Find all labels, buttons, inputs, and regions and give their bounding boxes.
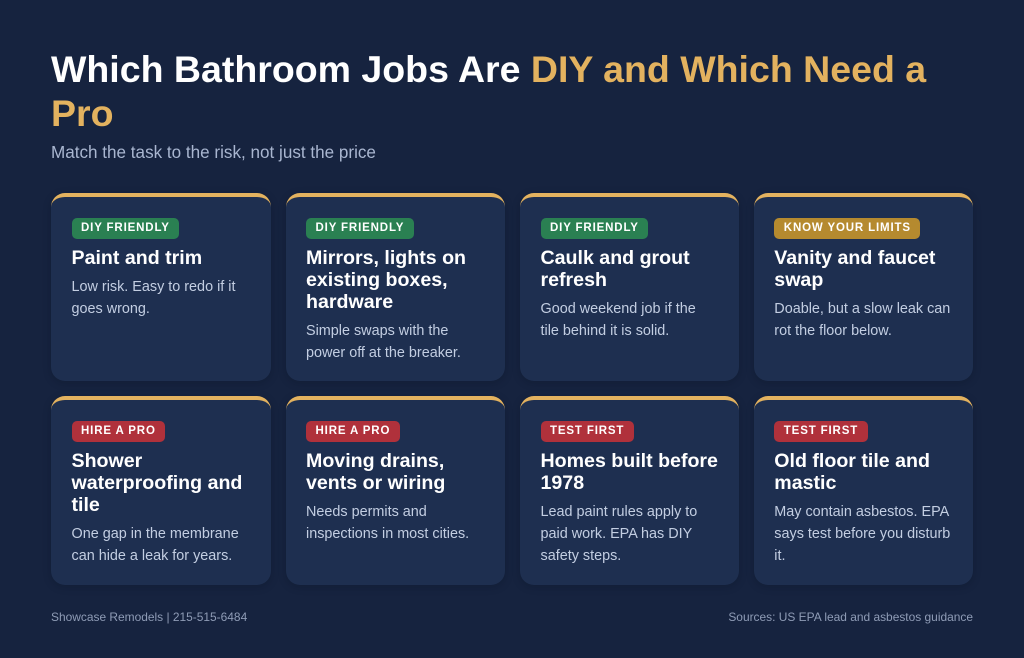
badge: test first: TEST FIRST [784,425,858,437]
heading: shower waterproofing: tile [72,494,100,516]
text: shower description: can hide a leak for years. [72,548,232,564]
badge: DIY friendly: DIY FRIENDLY [316,222,404,234]
heading: old floor tile: Old floor tile and [774,450,930,472]
panel: homes before 1978 [520,396,739,585]
text: drains description [306,504,469,542]
text: paint and trim description: Low risk. Easy to redo if it [72,279,235,295]
heading: mirrors, lights, hardware: hardware [306,291,393,313]
heading: moving drains: vents or wiring [306,472,445,494]
badge: DIY friendly [540,218,648,238]
text: asbestos description: May contain asbestos. EPA [774,504,949,520]
badge: know your limits [774,218,920,238]
heading: paint and trim: Paint and trim [72,247,202,269]
title [51,48,926,134]
badge: DIY friendly: DIY FRIENDLY [550,222,639,234]
text: caulk description [540,301,696,339]
badge: hire a pro [306,421,400,442]
heading: old floor tile [774,450,930,494]
heading: old floor tile: mastic [774,472,836,494]
heading: mirrors, lights, hardware: existing boxes, [306,269,448,291]
heading: shower waterproofing: waterproofing and [72,472,242,494]
text: shower description [72,526,239,564]
text: mirrors description [306,323,461,361]
text: lead paint description: safety steps. [540,548,621,564]
heading: caulk and grout: refresh [540,269,607,291]
footer: company contact: Showcase Remodels | 215-515-6484 [51,610,247,624]
heading: caulk and grout [540,247,690,291]
text: asbestos description: it. [774,548,786,564]
badge: hire a pro: HIRE A PRO [81,425,156,437]
panel: vanity and faucet [754,193,973,381]
text: paint and trim description: goes wrong. [72,301,150,317]
panel: shower waterproofing [51,396,271,585]
heading: homes before 1978: Homes built before [540,450,718,472]
badge: test first [774,421,868,442]
heading: vanity and faucet: Vanity and faucet [774,247,935,269]
text: lead paint description: Lead paint rules apply to [540,504,697,520]
text: lead paint description [540,504,697,564]
heading: shower waterproofing [72,450,242,516]
text: asbestos description [774,504,950,564]
heading: vanity and faucet: swap [774,269,823,291]
badge: DIY friendly [306,218,414,238]
text: vanity description [774,301,950,339]
title: Which Bathroom Jobs Are DIY and Which Need a [51,48,926,90]
heading: homes before 1978 [540,450,718,494]
text: drains description: Needs permits and [306,504,427,520]
text: lead paint description: paid work. EPA has DIY [540,526,692,542]
heading: mirrors, lights, hardware [306,247,466,313]
title: Pro [51,92,114,134]
badge: hire a pro [72,421,165,442]
text: caulk description: Good weekend job if the [540,301,696,317]
text: mirrors description: Simple swaps with the [306,323,448,339]
panel: moving drains [286,396,505,585]
text: vanity description: rot the floor below. [774,323,892,339]
heading: vanity and faucet [774,247,936,291]
badge: DIY friendly [72,218,179,238]
text: paint and trim description [72,279,236,317]
subtitle: Match the task to the risk, not just the price [51,143,376,162]
panel: old floor tile [754,396,973,585]
badge: DIY friendly: DIY FRIENDLY [81,222,170,234]
footer: sources: Sources: US EPA lead and asbestos guidance [728,610,973,624]
text: mirrors description: power off at the breaker. [306,345,461,361]
text: shower description: One gap in the membrane [72,526,239,542]
heading: homes before 1978: 1978 [540,472,584,494]
badge: know your limits: KNOW YOUR LIMITS [784,222,911,234]
heading: moving drains [306,450,445,494]
text: drains description: inspections in most cities. [306,526,469,542]
panel: caulk and grout [520,193,739,381]
panel: paint and trim [51,193,271,381]
badge: test first [540,421,634,442]
heading: caulk and grout: Caulk and grout [540,247,690,269]
heading: mirrors, lights, hardware: Mirrors, lights on [306,247,466,269]
heading: shower waterproofing: Shower [72,450,142,472]
panel: mirrors, lights, hardware [286,193,505,381]
badge: test first: TEST FIRST [550,425,624,437]
text: asbestos description: says test before you disturb [774,526,950,542]
text: vanity description: Doable, but a slow leak can [774,301,950,317]
badge: hire a pro: HIRE A PRO [316,425,390,437]
text: caulk description: tile behind it is solid. [540,323,669,339]
heading: moving drains: Moving drains, [306,450,444,472]
